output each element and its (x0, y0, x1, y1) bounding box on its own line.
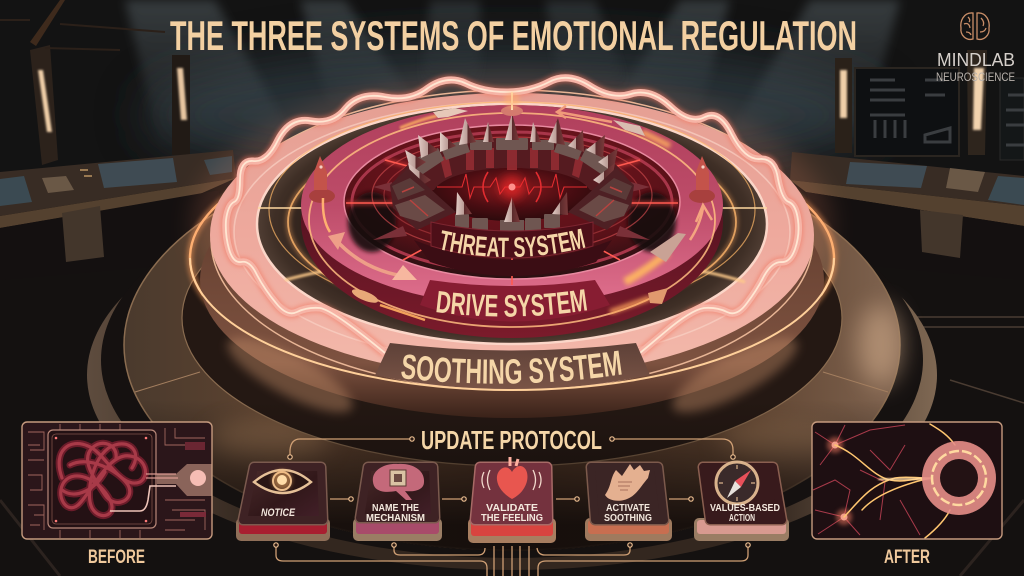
label: soothing system plate (375, 343, 650, 389)
card: validate the feeling (468, 457, 556, 543)
label: before: BEFORE (88, 547, 145, 568)
left wall with pillars and glowing strips (0, 0, 190, 165)
back spikes (405, 113, 618, 190)
dark side left (348, 192, 396, 252)
wall rim lines (211, 90, 813, 390)
left control console (0, 150, 236, 280)
terminal (110, 464, 212, 511)
front fade to dark (123, 139, 901, 551)
text: validate the feeling: VALIDATE (486, 502, 538, 514)
pulse lines (437, 174, 587, 198)
specular left (210, 420, 330, 460)
circuit traces (28, 424, 206, 538)
ring bevel (234, 102, 790, 362)
back wall grey blocks (412, 138, 612, 176)
pulse core (508, 184, 516, 190)
icon: compass (716, 462, 758, 504)
text: threat system: THREAT SYSTEM (442, 228, 586, 257)
arrow right upward (690, 205, 712, 240)
card: notice (236, 467, 330, 541)
rocket left vertical (309, 156, 335, 203)
central pit (344, 125, 680, 279)
neuron bodies (827, 437, 852, 525)
text: values-based action: ACTION (729, 512, 755, 524)
red radial beams (346, 160, 678, 285)
card: values-based action (694, 462, 789, 541)
panel frame (812, 422, 1002, 539)
dark side right (628, 192, 676, 252)
wavy ribbon highlight (226, 78, 799, 353)
text: values-based action: VALUES-BASED (710, 502, 780, 514)
logo: MindLab Neuroscience (936, 13, 1015, 84)
drive ring markers and rockets (309, 92, 715, 320)
specular front right (720, 420, 840, 460)
wall monitor (855, 68, 959, 156)
chip corner lights (55, 437, 147, 522)
text: name the mechanism (366, 502, 425, 524)
ring side wall (301, 106, 723, 338)
label: drive system plate (420, 280, 610, 322)
soothing system ring (200, 90, 824, 426)
rocket top left (400, 108, 468, 128)
text: validate the feeling (481, 502, 543, 524)
gold energy arcs inside the gap (250, 102, 775, 318)
rocket top right (613, 120, 670, 146)
text: values-based action (710, 502, 780, 524)
connector nodes (274, 437, 750, 547)
pink cycle arrow (328, 232, 417, 280)
specular right (858, 305, 902, 385)
icon: heart with sound waves (482, 457, 541, 499)
wavy ribbon halo (226, 78, 799, 353)
text: name the mechanism: MECHANISM (366, 512, 425, 524)
pulse arcs (483, 172, 541, 202)
inner gap (257, 104, 767, 344)
icon: brain with chip (373, 464, 424, 500)
connector lines (276, 439, 748, 576)
panel frame (22, 422, 212, 539)
knot strands (59, 443, 145, 516)
front inward spikes (456, 192, 568, 222)
back wall rings (372, 137, 652, 253)
left armoured blocks (390, 168, 456, 230)
text: name the mechanism: NAME THE (372, 502, 419, 514)
dark band (101, 162, 923, 558)
right armoured blocks (568, 168, 634, 230)
central hole (432, 165, 592, 221)
threat system (346, 113, 678, 285)
ring top face (210, 93, 814, 377)
text: activate soothing (604, 502, 652, 524)
text: soothing system: SOOTHING SYSTEM (401, 350, 622, 384)
back wall (392, 138, 632, 190)
wavy ribbon (226, 78, 799, 353)
outer rim (87, 180, 937, 570)
heading: update protocol: UPDATE PROTOCOL (421, 425, 602, 455)
arrow top right (557, 106, 612, 122)
front blocks (455, 214, 560, 232)
pit rim line (352, 132, 672, 272)
threat front base (414, 240, 612, 276)
thin neuron branches (813, 425, 920, 535)
tangled knot (59, 443, 145, 516)
inner chip (48, 430, 156, 528)
outward spikes (373, 182, 650, 240)
icon: brain (961, 13, 989, 39)
gold line round base (309, 113, 715, 327)
label: after: AFTER (884, 547, 930, 568)
rocket lower right (625, 233, 686, 282)
wall sheen left (219, 324, 361, 426)
inner dark disc (182, 170, 842, 466)
gold axons (835, 424, 955, 538)
card: name the mechanism (353, 464, 442, 541)
right control console (790, 152, 1024, 280)
text: MINDLAB: MINDLAB (937, 50, 1015, 70)
back wall red columns (440, 148, 584, 178)
panel: before (22, 422, 212, 539)
bronze disc (124, 140, 900, 550)
card: activate soothing (585, 464, 672, 541)
wall sheen right (664, 324, 806, 426)
label: threat system plate (430, 222, 594, 258)
platform disc (87, 139, 937, 570)
gold halo behind ring (190, 75, 834, 390)
icon: open hand (605, 464, 650, 501)
pulse core glow (500, 175, 524, 199)
panel: after (812, 422, 1002, 539)
text: activate soothing: SOOTHING (604, 512, 652, 524)
text: validate the feeling: THE FEELING (481, 512, 543, 524)
rocket right vertical (689, 156, 715, 203)
text: activate soothing: ACTIVATE (606, 502, 650, 514)
ring side wall (200, 142, 824, 418)
glowing ring (922, 441, 996, 515)
rocket front right (610, 288, 668, 312)
front gold halo line (190, 258, 834, 390)
icon: eye (254, 470, 311, 493)
text: notice: NOTICE (261, 507, 296, 519)
right wall with screens and glowing strips (835, 50, 1024, 160)
ring top face (301, 105, 723, 305)
rocket front left (350, 287, 425, 320)
orbit flame left (323, 198, 330, 232)
text: drive system: DRIVE SYSTEM (436, 289, 588, 317)
drive system ring (301, 105, 723, 338)
top node (501, 92, 523, 116)
